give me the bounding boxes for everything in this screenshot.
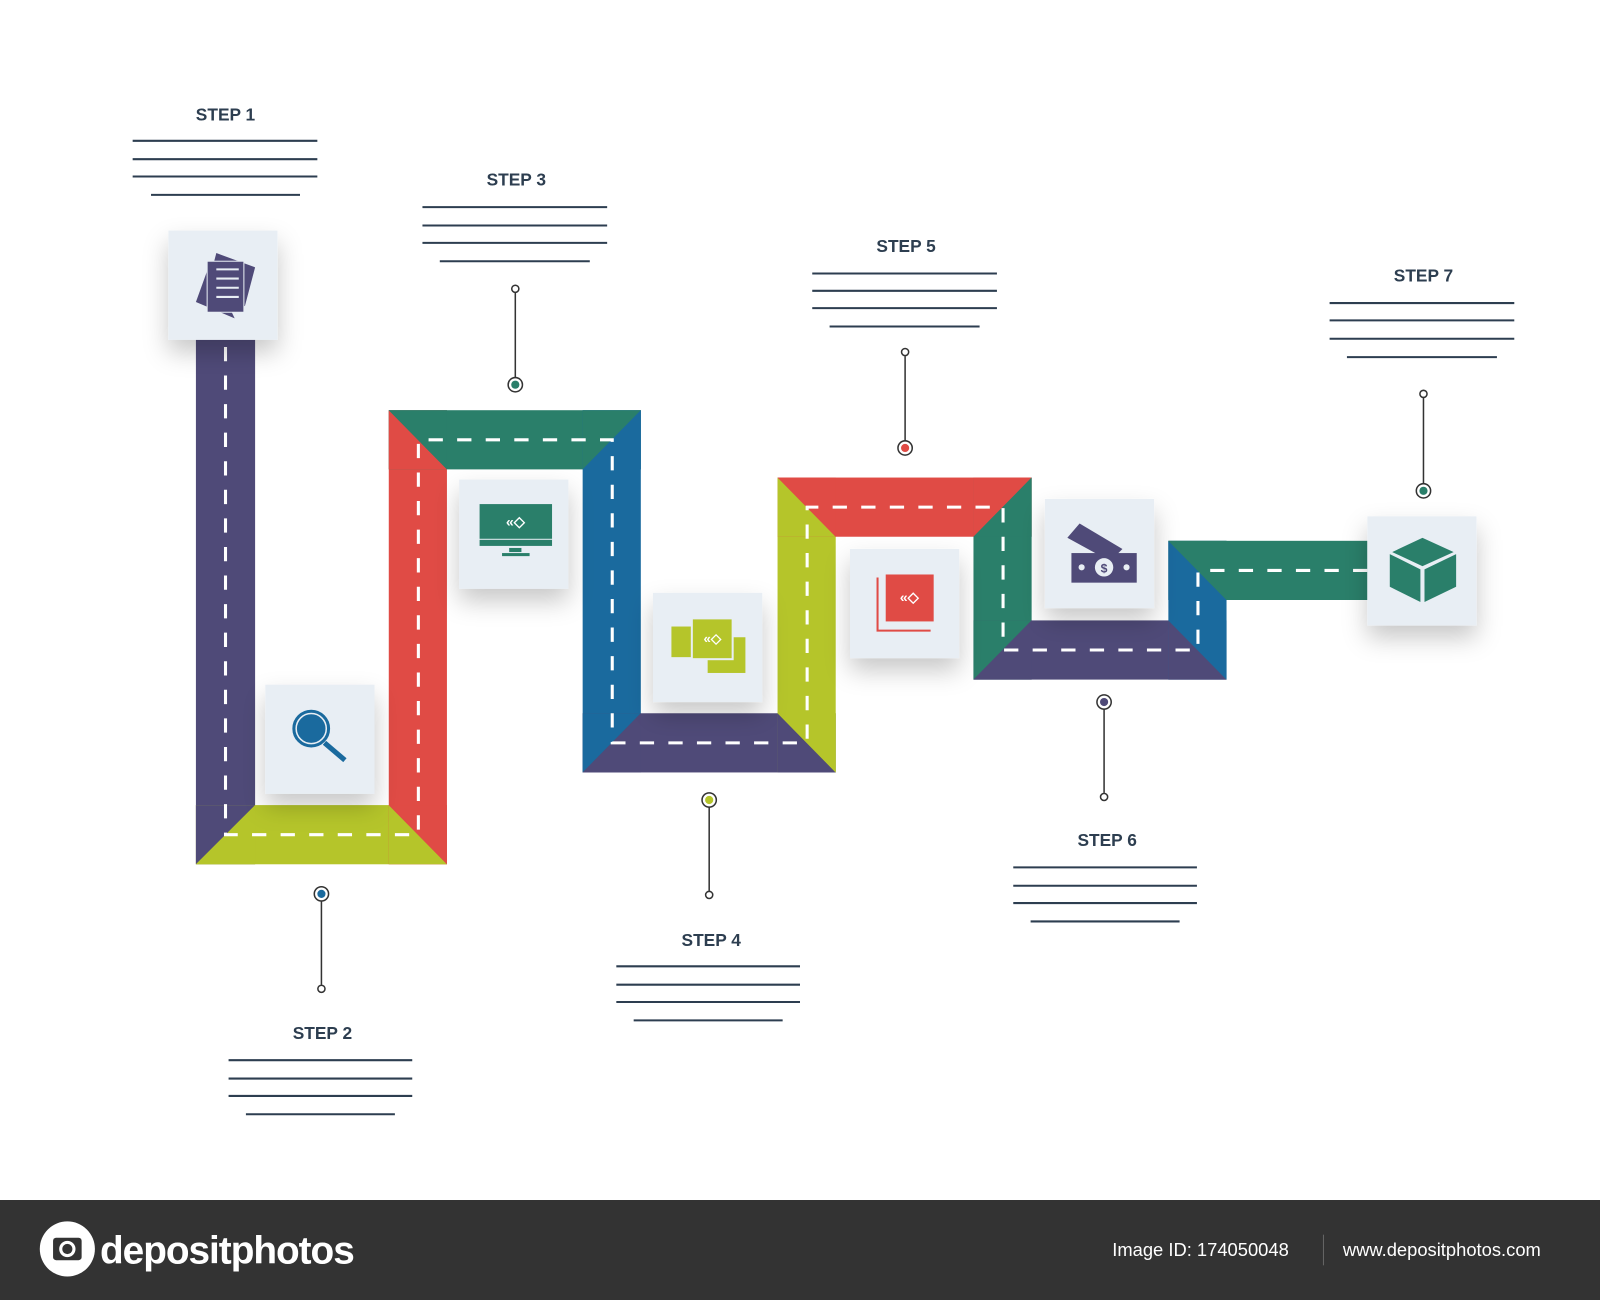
icon box: step 3 monitor (459, 480, 568, 589)
step 3 text block: STEP 3 (487, 170, 546, 190)
step 4 text block: STEP 4 (682, 930, 741, 950)
step 6 text block: STEP 6 (1077, 830, 1137, 850)
footer bar (0, 1200, 1600, 1300)
step 2 text block: STEP 2 (293, 1023, 352, 1043)
icon box: step 2 magnifier (265, 685, 374, 794)
icon box: step 5 card (850, 549, 959, 658)
footer bar: depositphotos (100, 1229, 354, 1272)
footer bar: Image ID: 174050048 (1112, 1239, 1289, 1260)
step 7 text block: STEP 7 (1394, 266, 1453, 286)
icon box: step 5 card: «◇ (900, 590, 920, 606)
step 5 text block: STEP 5 (876, 236, 936, 256)
icon box: step 3 monitor: «◇ (506, 515, 526, 531)
road path (196, 340, 1367, 864)
icon box: step 4 cards: «◇ (703, 631, 722, 646)
icon box: step 7 package (1367, 516, 1477, 626)
icon box: step 4 cards (653, 593, 762, 702)
footer bar: www.depositphotos.com (1342, 1239, 1541, 1260)
step 1 text block: STEP 1 (196, 104, 256, 124)
connectors (314, 285, 1431, 992)
icon box: step 6 money (1045, 499, 1154, 608)
icon box: step 6 money: $ (1101, 561, 1108, 575)
icon box: step 1 documents (168, 231, 278, 340)
